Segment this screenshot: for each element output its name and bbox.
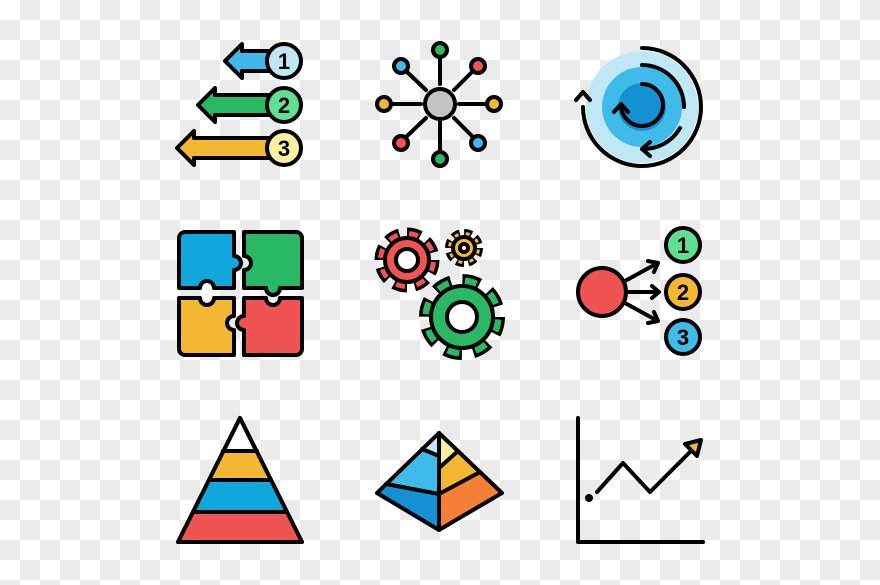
icon: numbered arrows: 2 bbox=[278, 93, 290, 118]
icon: branching options bbox=[578, 228, 700, 354]
icon: branching options: 3 bbox=[677, 325, 689, 350]
icon: branching options: 1 bbox=[677, 233, 689, 258]
icon: numbered arrows: 3 bbox=[278, 136, 290, 161]
icon: pyramid 3d bbox=[377, 433, 502, 530]
icon: puzzle bbox=[179, 232, 302, 355]
icon: growth chart bbox=[578, 418, 703, 542]
icon: gears bbox=[381, 234, 498, 353]
icon: branching options: 2 bbox=[677, 280, 689, 305]
icon: numbered arrows bbox=[177, 44, 301, 165]
icon: cycle bbox=[576, 48, 701, 166]
icon: numbered arrows: 1 bbox=[278, 49, 290, 74]
icon: network hub bbox=[377, 43, 501, 166]
icon: layered triangle bbox=[178, 418, 302, 542]
